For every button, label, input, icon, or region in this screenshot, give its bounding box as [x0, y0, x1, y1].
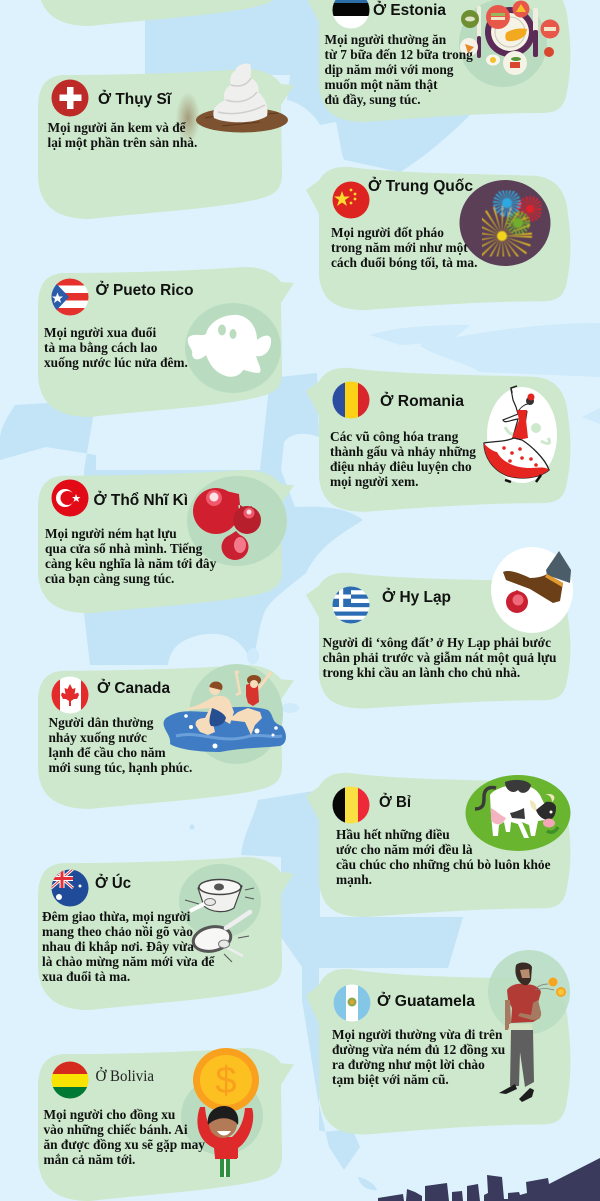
flag: Greece: [332, 586, 370, 625]
bubble: [38, 857, 294, 1010]
heading: Ở Bỉ: [379, 792, 412, 811]
text block: vào những chiếc bánh. Ai: [44, 1122, 188, 1137]
flag: Turkey: [52, 480, 88, 516]
bubble: [38, 267, 294, 417]
icon: festive food plates: [459, 0, 560, 87]
text block: [44, 1107, 205, 1167]
flag: Bolivia: [51, 1061, 89, 1099]
text block: mang theo chảo nồi gõ vào: [42, 924, 193, 939]
heading: Ở Thụy Sĩ: [98, 89, 172, 108]
text block: Hầu hết những điều: [336, 827, 450, 842]
text block: ra đường như một lời chào: [332, 1057, 485, 1072]
icon: boy holding coin: [181, 1048, 263, 1177]
flag: Australia: [51, 869, 89, 907]
icon: ice cream on plate: [176, 64, 288, 144]
world map background: [0, 0, 480, 1190]
text block: [324, 32, 473, 107]
panel: Úc: [38, 857, 294, 1010]
icon: ghost: [185, 303, 281, 393]
panel: Guatamela: [306, 950, 570, 1134]
text block: Người dân thường: [48, 715, 154, 730]
flag: Canada: [51, 676, 90, 714]
icon: pot and pan: [179, 864, 261, 962]
text block: là chào mừng năm mới vừa để: [42, 954, 215, 969]
text block: xua đuổi tà ma.: [42, 969, 130, 984]
text block: điệu nhảy điêu luyện cho: [330, 459, 472, 474]
text block: [331, 225, 477, 270]
text block: càng kêu nghĩa là năm tới đây: [45, 556, 217, 571]
heading: Ở Estonia: [373, 0, 446, 19]
text block: cầu chúc cho những chú bò luôn khỏe: [336, 857, 551, 872]
icon: people jumping into cold water: [164, 664, 286, 764]
icon: man throwing coins: [488, 950, 570, 1102]
bubble: [306, 773, 570, 917]
text block: trong khi cầu an lành cho chủ nhà.: [322, 665, 520, 680]
city skyline: [378, 1158, 600, 1201]
icon: fireworks: [460, 180, 550, 266]
flag: Belgium: [332, 786, 371, 824]
text block: tạm biệt với năm cũ.: [332, 1072, 449, 1087]
icon: cow on green field: [466, 775, 570, 851]
panel: Thụy Sĩ: [38, 64, 294, 219]
text block: Người đi ‘xông đất’ ở Hy Lạp phải bước: [322, 635, 551, 650]
bubble: [38, 470, 294, 613]
flag: Switzerland: [52, 80, 88, 116]
flag: Romania: [332, 381, 371, 419]
heading: Ở Thổ Nhĩ Kì: [94, 490, 188, 509]
text block: [45, 526, 217, 586]
flag: Puerto Rico: [51, 278, 89, 316]
panel: Bỉ: [306, 773, 570, 917]
text block: lạnh để cầu cho năm: [48, 745, 166, 760]
heading: Ở Guatamela: [377, 991, 475, 1010]
bubble: [306, 969, 570, 1134]
panel: Thổ Nhĩ Kì: [38, 470, 294, 613]
heading: Ở Canada: [97, 678, 170, 697]
text block: đủ đầy, sung túc.: [324, 92, 421, 107]
text block: mọi người xem.: [330, 474, 418, 489]
text block: dịp năm mới với mong: [324, 62, 454, 77]
bubble: [306, 573, 570, 708]
top bubble: [38, 0, 294, 26]
icon: flamenco dancer: [484, 386, 557, 483]
text block: mắn cả năm tới.: [44, 1152, 135, 1167]
text block: thành gấu và nhảy những: [330, 444, 476, 459]
icon: boy holding coin: $: [215, 1060, 237, 1102]
text block: Mọi người thường ăn: [324, 32, 447, 47]
bubble: [306, 167, 570, 310]
text block: Mọi người ném hạt lựu: [45, 526, 177, 541]
text block: cách đuổi bóng tối, tà ma.: [331, 255, 477, 270]
text block: tà ma bằng cách lao: [44, 340, 158, 355]
text block: Mọi người xua đuổi: [44, 325, 156, 340]
heading: Ở Úc: [95, 873, 131, 892]
text block: [336, 827, 551, 887]
panel: Romania: [306, 368, 570, 512]
text block: Mọi người thường vừa đi trên: [332, 1027, 503, 1042]
panel: Pueto Rico: [38, 267, 294, 417]
text block: nhảy xuống nước: [48, 730, 147, 745]
text block: ước cho năm mới đều là: [336, 842, 473, 857]
text block: từ 7 bữa đến 12 bữa trong: [324, 47, 473, 62]
panel: Trung Quốc: [306, 167, 570, 310]
text block: [42, 909, 215, 984]
text block: đường vừa ném đủ 12 đồng xu: [332, 1042, 506, 1057]
icon: boot crushing pomegranate: [491, 547, 573, 633]
heading: Ở Hy Lạp: [382, 587, 451, 606]
text block: ăn được đồng xu sẽ gặp may: [44, 1137, 205, 1152]
icon: pomegranates: [187, 476, 287, 566]
text block: lại một phần trên sàn nhà.: [48, 135, 197, 150]
heading: Ở Trung Quốc: [368, 176, 473, 195]
panel: Bolivia: [38, 1048, 294, 1201]
text block: trong năm mới như một: [331, 240, 468, 255]
text block: [332, 1027, 506, 1087]
text block: Mọi người ăn kem và để: [48, 120, 187, 135]
text block: của bạn càng sung túc.: [45, 571, 174, 586]
text block: qua cửa sổ nhà mình. Tiếng: [45, 541, 203, 556]
heading: Ở Romania: [380, 391, 464, 410]
text block: muốn một năm thật: [324, 77, 438, 92]
panel: Hy Lạp: [306, 547, 573, 708]
text block: chân phải trước và giẫm nát một quả lựu: [322, 650, 557, 665]
bubble: [38, 1048, 294, 1201]
text block: [48, 715, 192, 775]
text block: nhau đi khắp nơi. Đây vừa: [42, 939, 194, 954]
text block: mạnh.: [336, 872, 372, 887]
text block: mới sung túc, hạnh phúc.: [48, 760, 192, 775]
text block: Đêm giao thừa, mọi người: [42, 909, 191, 924]
flag: China: [332, 182, 370, 218]
heading: Ở Bolivia: [96, 1068, 154, 1085]
panel: top partial: [38, 0, 294, 26]
flag: Guatemala: [333, 984, 371, 1022]
text block: [48, 120, 197, 150]
bubble: [306, 368, 570, 512]
text block: Mọi người đốt pháo: [331, 225, 444, 240]
text block: Mọi người cho đồng xu: [44, 1107, 176, 1122]
text block: [44, 325, 188, 370]
heading: Ở Pueto Rico: [96, 280, 194, 299]
panel: Canada: [38, 664, 294, 809]
bubble: [38, 69, 294, 219]
text block: [322, 635, 557, 680]
text block: [330, 429, 476, 489]
flag: Estonia: [332, 0, 370, 29]
panel: Estonia: [306, 0, 570, 122]
bubble: [38, 665, 294, 809]
text block: Các vũ công hóa trang: [330, 429, 459, 444]
map islands: [247, 323, 600, 713]
text block: xuống nước lúc nửa đêm.: [44, 355, 188, 370]
bubble: [306, 0, 570, 122]
